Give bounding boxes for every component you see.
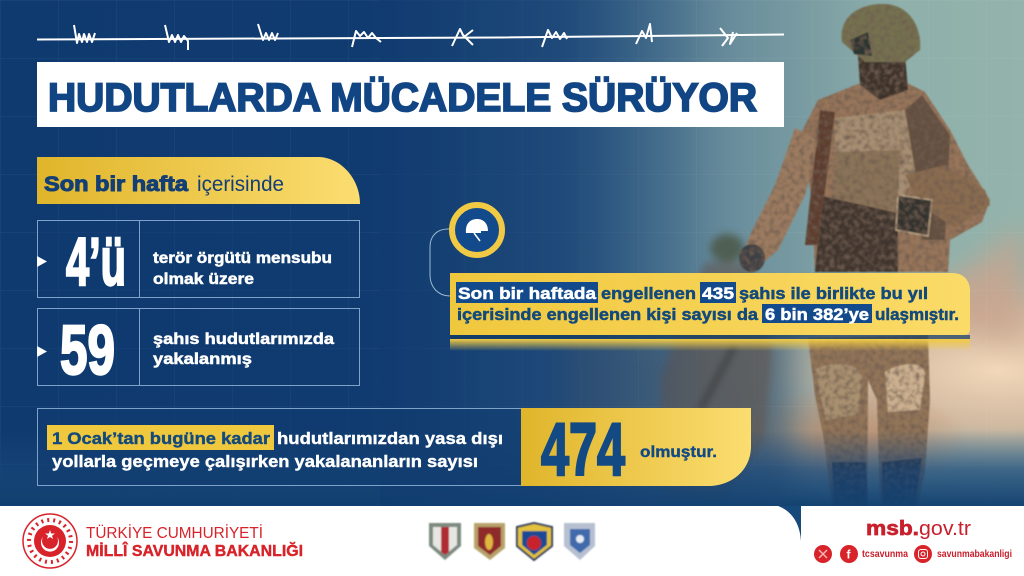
highlight: son bir haftada	[456, 282, 598, 303]
ministry name: TÜRKİYE CUMHURİYETİ	[86, 524, 263, 542]
icon: x	[814, 545, 832, 563]
soldier arms	[739, 128, 990, 272]
handle: savunmabakanligi: savunmabakanligi	[937, 549, 1012, 560]
text: line one: hudutlarımızdan yasa dışı	[277, 429, 503, 448]
text: olmuştur: olmuştur.	[640, 444, 717, 461]
callout text: rest of line one: şahıs ile birlikte bu yıl	[739, 285, 928, 303]
barbed wire	[37, 24, 784, 50]
banner: son bir hafta	[37, 157, 360, 204]
left blue fade	[380, 0, 710, 510]
soldier legs	[808, 335, 930, 506]
website light: gov.tr	[919, 518, 971, 540]
website bold: msb.	[866, 518, 919, 540]
callout text: ulaşmıştır: ulaşmıştır.	[875, 306, 959, 324]
highlight: 6 bin 382'ye	[762, 304, 872, 323]
handle: tcsavunma: tcsavunma	[862, 549, 908, 560]
callout text: son bir haftada: Son bir haftada	[458, 285, 597, 303]
banner text bold: Son bir hafta	[44, 173, 188, 196]
text: highlighted: 1 Ocak’tan bugüne kadar	[52, 429, 270, 448]
title text: HUDUTLARDA MÜCADELE SÜRÜYOR	[48, 75, 757, 120]
callout text: 6 bin 382'ye: 6 bin 382’ye	[765, 306, 869, 324]
footer	[0, 506, 1024, 576]
bottom stat panel	[38, 408, 751, 491]
website	[866, 518, 971, 540]
main soldier	[739, 4, 990, 506]
number 474: 474	[541, 408, 625, 491]
emblem: air forces	[517, 523, 552, 560]
ministry name bold: MİLLÎ SAVUNMA BAKANLIĞI	[86, 542, 303, 560]
bottom fade	[0, 430, 1024, 510]
arrow	[37, 256, 47, 267]
callout panel	[450, 273, 970, 351]
text: line two: yollarla geçmeye çalışırken yakalananların sayısı	[52, 452, 478, 471]
icon: instagram	[914, 545, 932, 563]
highlight	[47, 425, 274, 450]
ministry logo	[23, 514, 77, 568]
label line 2: olmak üzere	[153, 271, 254, 288]
highlight: 435	[700, 282, 736, 303]
banner text light: içerisinde	[197, 173, 284, 196]
gold block	[521, 408, 751, 486]
icon: facebook	[840, 545, 858, 563]
label: şahıs hudutlarımızda	[153, 331, 334, 348]
callout text: engellenen: engellenen	[601, 285, 696, 303]
stat box: 59	[37, 308, 360, 389]
emblem: naval forces	[474, 523, 505, 560]
arrow	[37, 346, 47, 357]
number 59: 59	[60, 311, 115, 389]
connector line	[430, 229, 450, 296]
number 4'ü: 4’ü	[66, 224, 126, 300]
title panel	[37, 62, 784, 127]
emblem: land forces	[429, 523, 461, 560]
background soldier	[660, 234, 772, 500]
emblem: gendarmerie	[564, 523, 595, 560]
icon: helmet	[452, 205, 502, 255]
callout text: line two: içerisinde engellenen kişi sayısı da	[457, 306, 759, 324]
soldier head	[842, 4, 920, 100]
label line 2: yakalanmış	[153, 351, 252, 368]
soldier vest	[805, 95, 950, 272]
label: terör örgütü mensubu	[153, 250, 332, 267]
soldier torso	[800, 82, 990, 272]
stat box: 4'ü	[37, 220, 360, 300]
icon: facebook: f	[846, 548, 852, 562]
callout text: 435: 435	[702, 285, 734, 303]
